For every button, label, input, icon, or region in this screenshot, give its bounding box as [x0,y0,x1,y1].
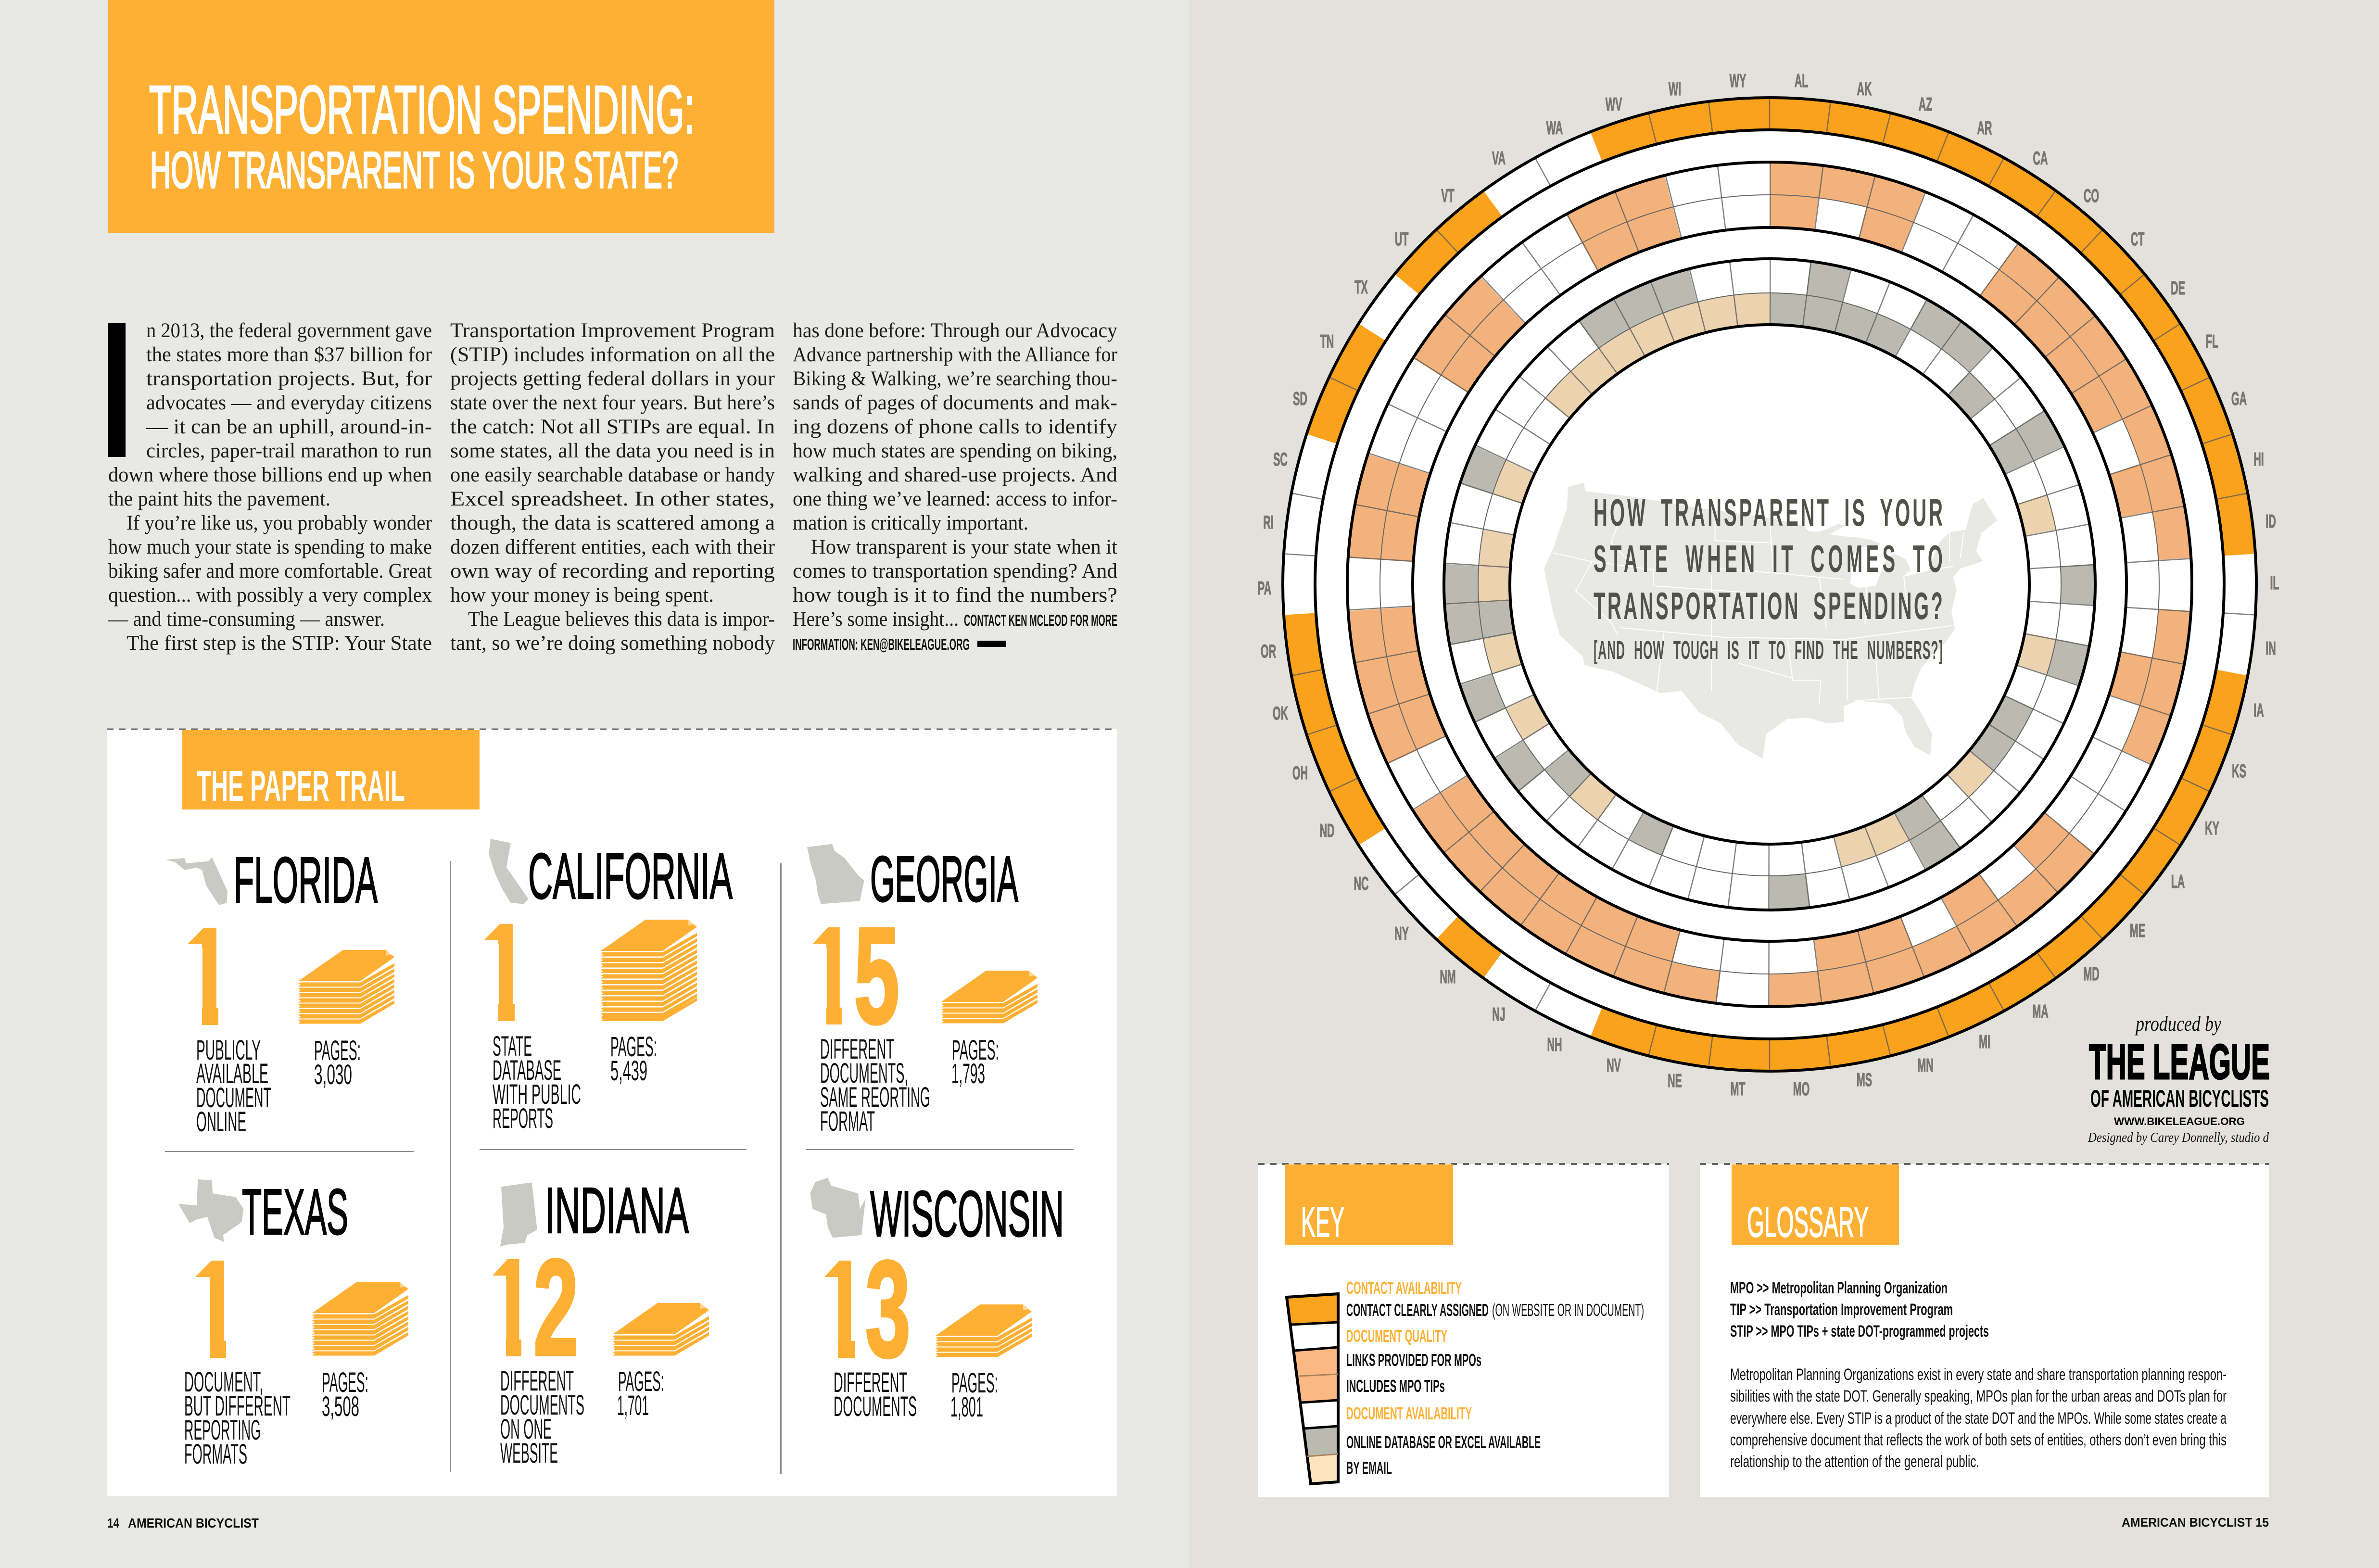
state card: Indiana: ON ONE [500,1414,552,1445]
state labels around the ring: WY [1730,70,1746,91]
article text: column 2: Excel spreadsheet. In other states, [450,488,775,510]
state card: Indiana: INDIANA [545,1174,689,1247]
state card: California: 1 [479,896,528,1049]
icon: Texas outline [178,1179,244,1242]
state card: Georgia: GEORGIA [870,843,1018,915]
legend text: INCLUDES MPO TIPs [1346,1376,1445,1396]
center heading: [AND HOW TOUGH IS IT TO FIND THE NUMBERS?] [1594,635,1943,665]
ring: document availability, gray cells [1477,293,2035,855]
icon: California outline [489,839,528,904]
state card: Wisconsin: 1,801 [950,1391,983,1423]
state card: Texas: PAGES: [322,1367,368,1398]
title banner [108,0,774,233]
state card: Wisconsin [810,1177,1064,1423]
state card: Florida: FLORIDA [234,844,378,916]
legend text: LINKS PROVIDED FOR MPOs [1346,1350,1481,1370]
state card: Florida: DOCUMENT [196,1082,271,1113]
article text: column 3: ing dozens of phone calls to identify [793,416,1118,438]
state card: Georgia: PAGES: [952,1035,999,1066]
state labels around the ring: MA [2032,1001,2049,1022]
article text: column 2: projects getting federal dollars in your [450,367,775,390]
state labels around the ring: MT [1731,1078,1745,1100]
state card: Wisconsin: WISCONSIN [870,1177,1064,1250]
state card: Indiana: WEBSITE [500,1438,558,1469]
article text: column 2: (STIP) includes information on all the [450,343,775,366]
center heading: HOW TRANSPARENT IS YOUR [1594,492,1943,534]
title banner: HOW TRANSPARENT IS YOUR STATE? [150,142,678,199]
article text: column 2: Transportation Improvement Program [450,319,775,342]
article text: column 2: one easily searchable database or handy [450,464,775,486]
state labels around the ring: SC [1273,449,1288,470]
panel: the paper trail [107,729,1117,1496]
state labels around the ring: KS [2232,760,2246,782]
article text: column 3: Biking & Walking, we’re searching thou- [793,367,1117,390]
article text: column 2: some states, all the data you need is in [450,440,775,462]
state labels around the ring: LA [2171,871,2185,892]
state labels around the ring: MO [1793,1078,1810,1100]
article text: column 2: how your money is being spent. [450,584,714,607]
legend text [1346,1278,1644,1478]
state labels around the ring: SD [1293,388,1307,409]
state card: California: REPORTS [493,1103,553,1134]
heading: glossary [1732,1164,1899,1246]
state labels around the ring [1258,70,2279,1100]
state card: Texas: 1 [190,1233,240,1386]
center heading: STATE WHEN IT COMES TO [1594,538,1943,581]
glossary definitions: MPO >> Metropolitan Planning Organization [1730,1279,1948,1297]
legend text: (ON WEBSITE OR IN DOCUMENT) [1492,1300,1644,1320]
article text: column 3 [793,319,1118,653]
state card: Indiana: 12 [488,1231,579,1384]
state labels around the ring: NM [1440,966,1456,987]
state labels around the ring: NJ [1492,1004,1506,1025]
article text: column 1: biking safer and more comfortable. Great [108,560,432,582]
state labels around the ring: FL [2206,331,2218,352]
credit block: The League: WWW.BIKELEAGUE.ORG [2114,1115,2245,1127]
state labels around the ring: PA [1258,578,1271,599]
icon: Florida outline [165,857,228,905]
state labels around the ring: VA [1492,148,1506,169]
article text: column 3: how much states are spending on biking, [793,440,1117,462]
icon: paper stack [941,971,1038,1024]
state labels around the ring: RI [1263,512,1274,533]
state card: Texas: REPORTING [184,1415,261,1446]
state labels around the ring: TN [1320,331,1334,352]
article text: column 3: INFORMATION: KEN@BIKELEAGUE.ORG [793,635,970,653]
article text: column 2: dozen different entities, each with their [450,536,775,558]
state card: Wisconsin: PAGES: [951,1367,998,1399]
radial chart: state transparency rings [1258,70,2279,1530]
state card: California: CALIFORNIA [528,840,733,912]
state card: Wisconsin: 13 [820,1233,911,1386]
state card: Georgia: 1,793 [951,1058,985,1089]
title banner: TRANSPORTATION SPENDING: [149,72,695,147]
state card: Florida [165,844,394,1138]
state labels around the ring: KY [2205,818,2219,839]
footer: left page: 14 [107,1516,119,1530]
article text: column 1 [108,319,432,655]
state card: Indiana: DIFFERENT [500,1366,574,1397]
state labels around the ring: MI [1979,1031,1990,1052]
state labels around the ring: WA [1546,117,1563,139]
state labels around the ring: AL [1795,70,1808,91]
state labels around the ring: AR [1977,117,1992,139]
state card: California: WITH PUBLIC [493,1079,581,1110]
glossary paragraph: relationship to the attention of the general public. [1730,1453,1979,1471]
center heading [1594,492,1943,665]
article text: column 3: Here’s some insight... [793,608,959,631]
legend swatch strip [1287,1294,1338,1484]
article text: column 1: how much your state is spending to make [108,536,432,558]
ring: contact clearly assigned [1280,94,2259,1075]
state labels around the ring: CO [2084,185,2099,206]
state labels around the ring: NY [1394,923,1409,944]
state labels around the ring: MD [2083,963,2100,985]
article text: column 1: circles, paper-trail marathon to run [146,440,432,462]
state labels around the ring: MS [1857,1069,1872,1090]
article text: column 3: one thing we’ve learned: access to infor- [793,488,1117,510]
state card: California [479,839,733,1134]
state labels around the ring: DE [2171,278,2185,299]
state labels around the ring: HI [2253,449,2264,470]
state labels around the ring: VT [1441,185,1455,206]
state card: California: DATABASE [493,1055,561,1086]
glossary definitions [1730,1279,1989,1340]
article text: column 1: down where those billions end up when [108,464,432,486]
article text: column 2: though, the data is scattered among a [450,512,775,534]
state labels around the ring: WV [1606,94,1622,115]
ring: online database or Excel available [1442,261,2097,912]
state labels around the ring: NC [1354,873,1368,894]
state labels around the ring: ID [2265,511,2276,532]
article text: column 2 [450,319,775,655]
state card: Texas: FORMATS [184,1439,247,1470]
state card: Georgia: DOCUMENTS, [820,1058,908,1089]
icon: Wisconsin outline [810,1178,865,1238]
map: contiguous United States [1544,483,1997,759]
legend text: BY EMAIL [1346,1458,1392,1478]
state labels around the ring: MN [1917,1055,1934,1076]
state card: Georgia: DIFFERENT [820,1034,894,1065]
state labels around the ring: AZ [1919,94,1932,115]
icon: paper stack [312,1282,408,1355]
state card: Texas: 3,508 [322,1391,359,1422]
article text: column 1: — it can be an uphill, around-in- [146,416,432,438]
state card: Indiana [488,1174,709,1469]
state labels around the ring: IL [2270,572,2279,594]
state card: California: STATE [493,1031,532,1062]
ring: links provided for MPOs [1345,162,2194,1010]
state labels around the ring: CT [2131,228,2144,250]
state card: Georgia: FORMAT [820,1106,875,1137]
article text: column 1: advocates — and everyday citizens [146,392,432,414]
state card: Florida: PAGES: [314,1035,361,1066]
icon: paper stack [936,1304,1032,1357]
article text: column 1: question... with possibly a very complex [108,584,432,607]
state card: Texas [178,1176,408,1470]
heading: the paper trail [182,730,480,810]
article text: column 3: CONTACT KEN MCLEOD FOR MORE [964,611,1117,629]
state card: Florida: ONLINE [196,1106,246,1138]
state labels around the ring: TX [1354,277,1368,298]
legend text: ONLINE DATABASE OR EXCEL AVAILABLE [1346,1432,1541,1452]
panel: key [1258,1164,1669,1497]
state labels around the ring: OR [1261,641,1276,662]
ring: includes MPO TIPs [1378,195,2155,974]
state card: Florida: 1 [183,900,232,1053]
legend text: CONTACT CLEARLY ASSIGNED [1346,1300,1489,1320]
panel: glossary [1700,1164,2269,1497]
article text: column 3: how tough is it to find the numbers? [793,584,1117,607]
article text: column 3: mation is critically important. [793,512,1028,534]
credit block: The League [2088,1012,2270,1145]
article text: column 3: walking and shared-use projects. And [793,464,1117,486]
article text: column 3: How transparent is your state when it [811,536,1117,558]
state card: Georgia: 15 [809,899,899,1052]
state card: Texas: TEXAS [242,1176,348,1248]
state labels around the ring: CA [2033,148,2048,169]
article text: column 1: the paint hits the pavement. [108,488,330,510]
state card: Texas: BUT DIFFERENT [184,1391,291,1422]
credit block: The League: produced by [2135,1012,2221,1036]
article text: column 1: n 2013, the federal government gave [146,319,432,342]
article text: column 2: the catch: Not all STIPs are equal. In [450,416,775,438]
state card: Georgia: SAME REORTING [820,1082,930,1113]
state card: Texas: DOCUMENT, [184,1366,263,1398]
article text: column 1: The first step is the STIP: Your State [127,632,432,655]
article text: column 2: tant, so we’re doing something nobody [450,632,775,655]
ring: by email [1476,291,2058,869]
state labels around the ring: IN [2265,638,2276,659]
icon: paper stack [298,950,394,1024]
article text: column 3: comes to transportation spending? And [793,560,1117,582]
legend text: DOCUMENT QUALITY [1346,1326,1447,1346]
state card: California: 5,439 [610,1055,647,1087]
state labels around the ring: OH [1292,762,1308,784]
state labels around the ring: ND [1320,820,1334,841]
state card: Indiana: PAGES: [618,1366,664,1397]
icon: paper stack [613,1303,709,1355]
state card: California: PAGES: [610,1031,657,1062]
article text: column 1: If you’re like us, you probably wonder [127,512,432,534]
article text: column 3: Advance partnership with the Alliance for [793,343,1117,366]
state labels around the ring: GA [2231,388,2247,409]
legend text: DOCUMENT AVAILABILITY [1346,1404,1472,1423]
article text: column 2: own way of recording and reporting [450,560,775,582]
state labels around the ring: OK [1273,703,1288,724]
credit block: The League: Designed by Carey Donnelly, studio d [2088,1130,2269,1145]
glossary definitions: TIP >> Transportation Improvement Program [1730,1301,1953,1319]
state card: Indiana: DOCUMENTS [500,1390,584,1421]
state card: Wisconsin: DIFFERENT [834,1367,907,1398]
heading: key [1285,1164,1453,1246]
state labels around the ring: NH [1547,1034,1562,1055]
state labels around the ring: AK [1857,78,1872,100]
heading: the paper trail: THE PAPER TRAIL [197,762,405,810]
state labels around the ring: NV [1607,1055,1621,1076]
footer: left page: AMERICAN BICYCLIST [128,1516,259,1530]
article text: column 1: the states more than $37 billion for [146,343,432,366]
article text: column 1: transportation projects. But, for [146,367,432,390]
article text: column 1: — and time-consuming — answer. [108,608,385,631]
state card: Florida: 3,030 [314,1059,352,1090]
glossary definitions: STIP >> MPO TIPs + state DOT-programmed projects [1730,1322,1989,1340]
state labels around the ring: NE [1668,1070,1682,1091]
article text: column 3: sands of pages of documents and mak- [793,392,1117,414]
state labels around the ring: WI [1669,78,1681,100]
state card: Georgia [807,843,1038,1137]
article text: column 3: has done before: Through our Advocacy [793,319,1117,342]
footer: right page: AMERICAN BICYCLIST 15 [2122,1515,2269,1530]
center heading: TRANSPORTATION SPENDING? [1594,585,1943,628]
heading: glossary: GLOSSARY [1747,1198,1869,1246]
article text: column 2: state over the next four years. But here’s [450,392,775,414]
state labels around the ring: ME [2130,920,2145,941]
state labels around the ring: UT [1395,228,1408,250]
article text: column 2: The League believes this data is impor- [468,608,775,631]
state labels around the ring: IA [2253,700,2264,721]
state card: Indiana: 1,701 [617,1390,649,1421]
legend text: CONTACT AVAILABILITY [1346,1278,1462,1298]
state card: Florida: AVAILABLE [196,1058,268,1089]
icon: Indiana outline [500,1182,537,1247]
glossary paragraph [1730,1366,2227,1471]
state card: Wisconsin: DOCUMENTS [834,1391,917,1422]
icon: paper stack [601,920,697,1021]
icon: Georgia outline [807,844,864,904]
heading: key: KEY [1301,1198,1344,1246]
state card: Florida: PUBLICLY [196,1035,261,1066]
